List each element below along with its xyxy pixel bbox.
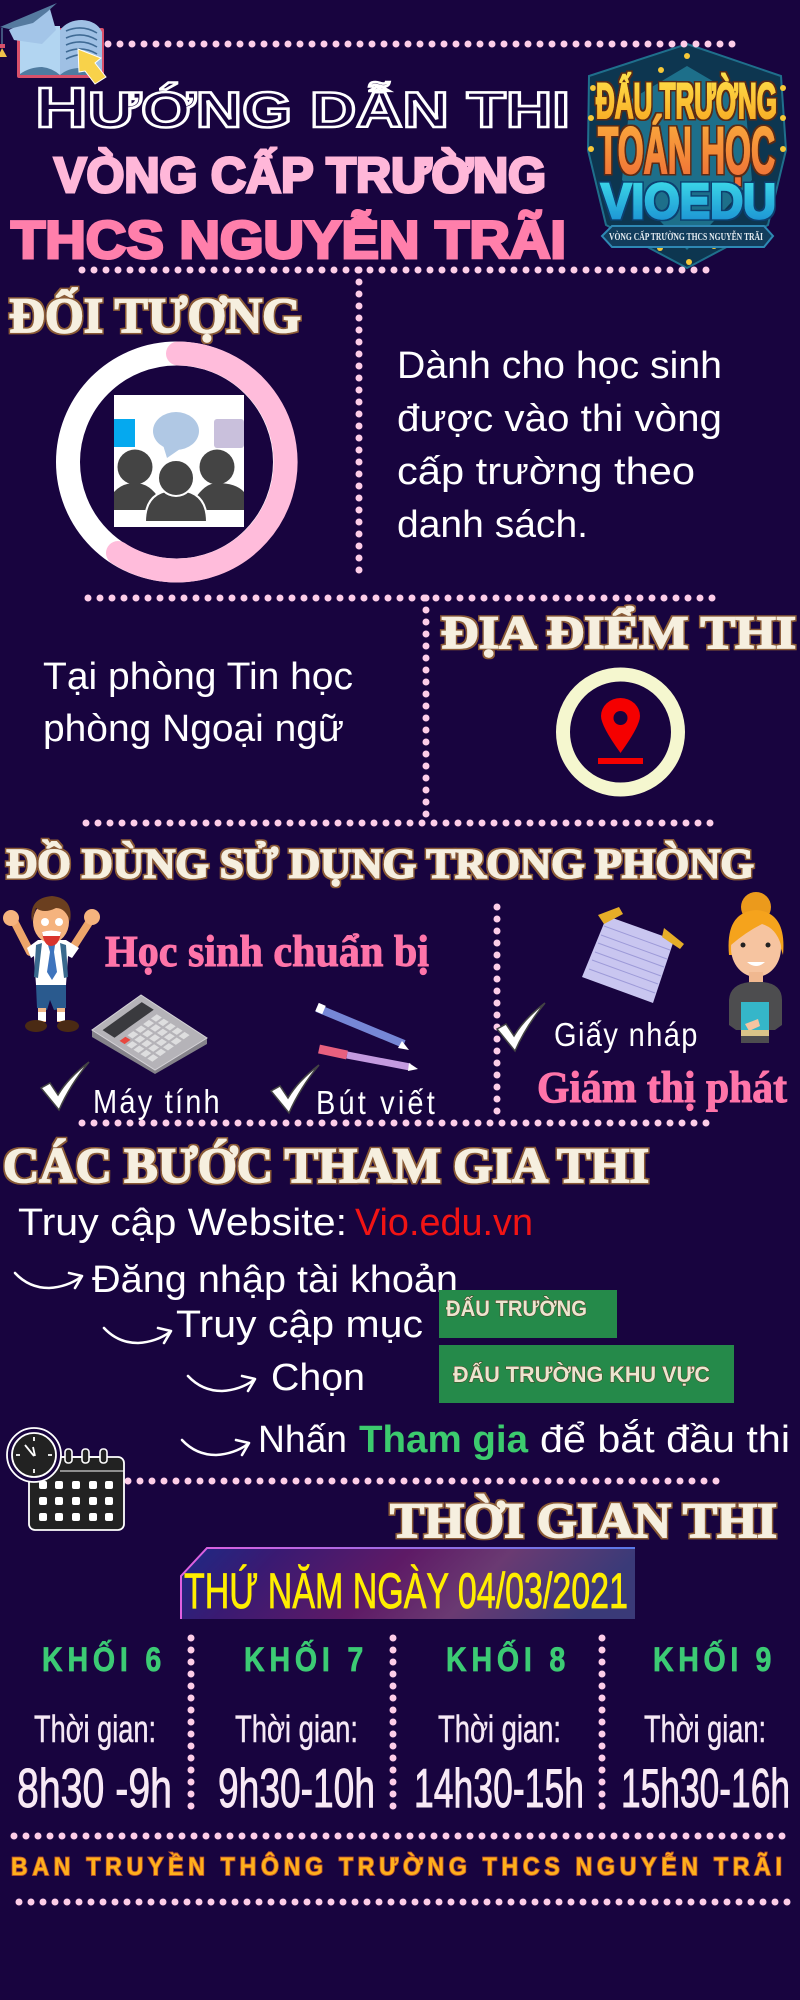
title: thcs nguyen trai: THCS NGUYỄN TRÃI	[11, 209, 566, 270]
step: chon: Chọn	[271, 1357, 365, 1399]
title: huong dan thi: HƯỚNG DẪN THI	[35, 76, 570, 140]
icon: student boy	[3, 896, 100, 1032]
step: truy cap website: Truy cập Website:	[18, 1202, 347, 1244]
text: doi tuong description: Dành cho học sinh	[397, 345, 722, 387]
title block	[11, 76, 570, 270]
arrow: step 2	[104, 1328, 171, 1343]
text: giam thi phat: Giám thị phát	[537, 1063, 787, 1112]
column: khoi 8: KHỐI 8	[446, 1640, 565, 1679]
icon: calendar and clock	[7, 1428, 124, 1530]
heading: doi tuong: ĐỐI TƯỢNG	[9, 286, 301, 343]
icon: calculator	[92, 995, 207, 1074]
text: hoc sinh chuan bi: Học sinh chuẩn bị	[105, 927, 429, 976]
icon: location pin	[563, 674, 678, 790]
column: khoi 8: Thời gian:	[438, 1709, 561, 1751]
heading: do dung su dung trong phong: ĐỒ DÙNG SỬ DỤNG TRONG PHÒNG	[6, 840, 754, 888]
footer: ban truyen thong: BAN TRUYỀN THÔNG TRƯỜNG THCS NGUYỄN TRÃI	[11, 1851, 782, 1881]
heading: dia diem thi: ĐỊA ĐIỂM THI	[441, 606, 796, 659]
arrow: step 4	[182, 1440, 249, 1455]
step: truy cap website: Vio.edu.vn	[355, 1202, 533, 1244]
column: khoi 8	[414, 1640, 584, 1819]
check: may tinh	[41, 1062, 89, 1110]
check: but viet	[271, 1065, 319, 1113]
text: dia diem description	[43, 656, 353, 750]
banner: exam date	[181, 1547, 635, 1619]
text: doi tuong description	[397, 345, 722, 546]
text: dia diem description: phòng Ngoại ngữ	[43, 708, 344, 750]
title: vong cap truong: VÒNG CẤP TRƯỜNG	[54, 148, 546, 203]
step: nhan tham gia: Nhấn	[258, 1419, 347, 1461]
icon: teacher	[729, 892, 783, 1043]
text: doi tuong description: cấp trường theo	[397, 451, 695, 493]
column: khoi 7: KHỐI 7	[244, 1640, 363, 1679]
step: truy cap muc: Truy cập mục	[176, 1304, 423, 1346]
column: khoi 9	[621, 1640, 790, 1819]
icon: graduation book with cursor	[0, 3, 106, 84]
icon: audience ring	[68, 354, 286, 570]
step: nhan tham gia	[258, 1418, 790, 1461]
text: doi tuong description: danh sách.	[397, 504, 588, 546]
step: nhan tham gia: để bắt đầu thi	[540, 1418, 790, 1461]
label: giay nhap: Giấy nháp	[554, 1016, 697, 1053]
label: but viet: Bút viết	[316, 1084, 435, 1121]
column: khoi 7: 9h30-10h	[218, 1757, 375, 1819]
column: khoi 7: Thời gian:	[235, 1709, 358, 1751]
icon: pens	[317, 1007, 418, 1071]
step: truy cap website	[18, 1202, 533, 1244]
column: khoi 7	[218, 1640, 375, 1819]
column: khoi 6: Thời gian:	[34, 1709, 156, 1751]
button: dau truong khu vuc	[439, 1345, 734, 1403]
logo: dau truong toan hoc vioedu	[588, 44, 786, 268]
text: dia diem description: Tại phòng Tin học	[43, 656, 353, 698]
step: nhan tham gia: Tham gia	[359, 1419, 529, 1461]
button: dau truong khu vuc: ĐẤU TRƯỜNG KHU VỰC	[453, 1362, 710, 1387]
heading: thoi gian thi: THỜI GIAN THI	[390, 1492, 777, 1548]
button: dau truong	[439, 1290, 617, 1338]
label: may tinh: Máy tính	[93, 1083, 220, 1120]
column: khoi 8: 14h30-15h	[414, 1757, 584, 1819]
step: dang nhap tai khoan: Đăng nhập tài khoản	[92, 1259, 458, 1301]
check: giay nhap	[497, 1003, 545, 1051]
arrow: step 1	[15, 1273, 82, 1288]
icon: note paper	[582, 907, 684, 1003]
column: khoi 9: KHỐI 9	[653, 1640, 771, 1679]
column: khoi 6	[17, 1640, 172, 1819]
logo line 3: VIOEDU	[601, 175, 776, 229]
text: doi tuong description: được vào thi vòng	[397, 398, 722, 440]
column: khoi 6: 8h30 -9h	[17, 1757, 172, 1819]
arrow: step 3	[188, 1376, 255, 1391]
column: khoi 6: KHỐI 6	[42, 1640, 161, 1679]
heading: cac buoc tham gia thi: CÁC BƯỚC THAM GIA THI	[3, 1137, 649, 1193]
logo ribbon	[602, 226, 773, 247]
button: dau truong: ĐẤU TRƯỜNG	[446, 1296, 587, 1321]
